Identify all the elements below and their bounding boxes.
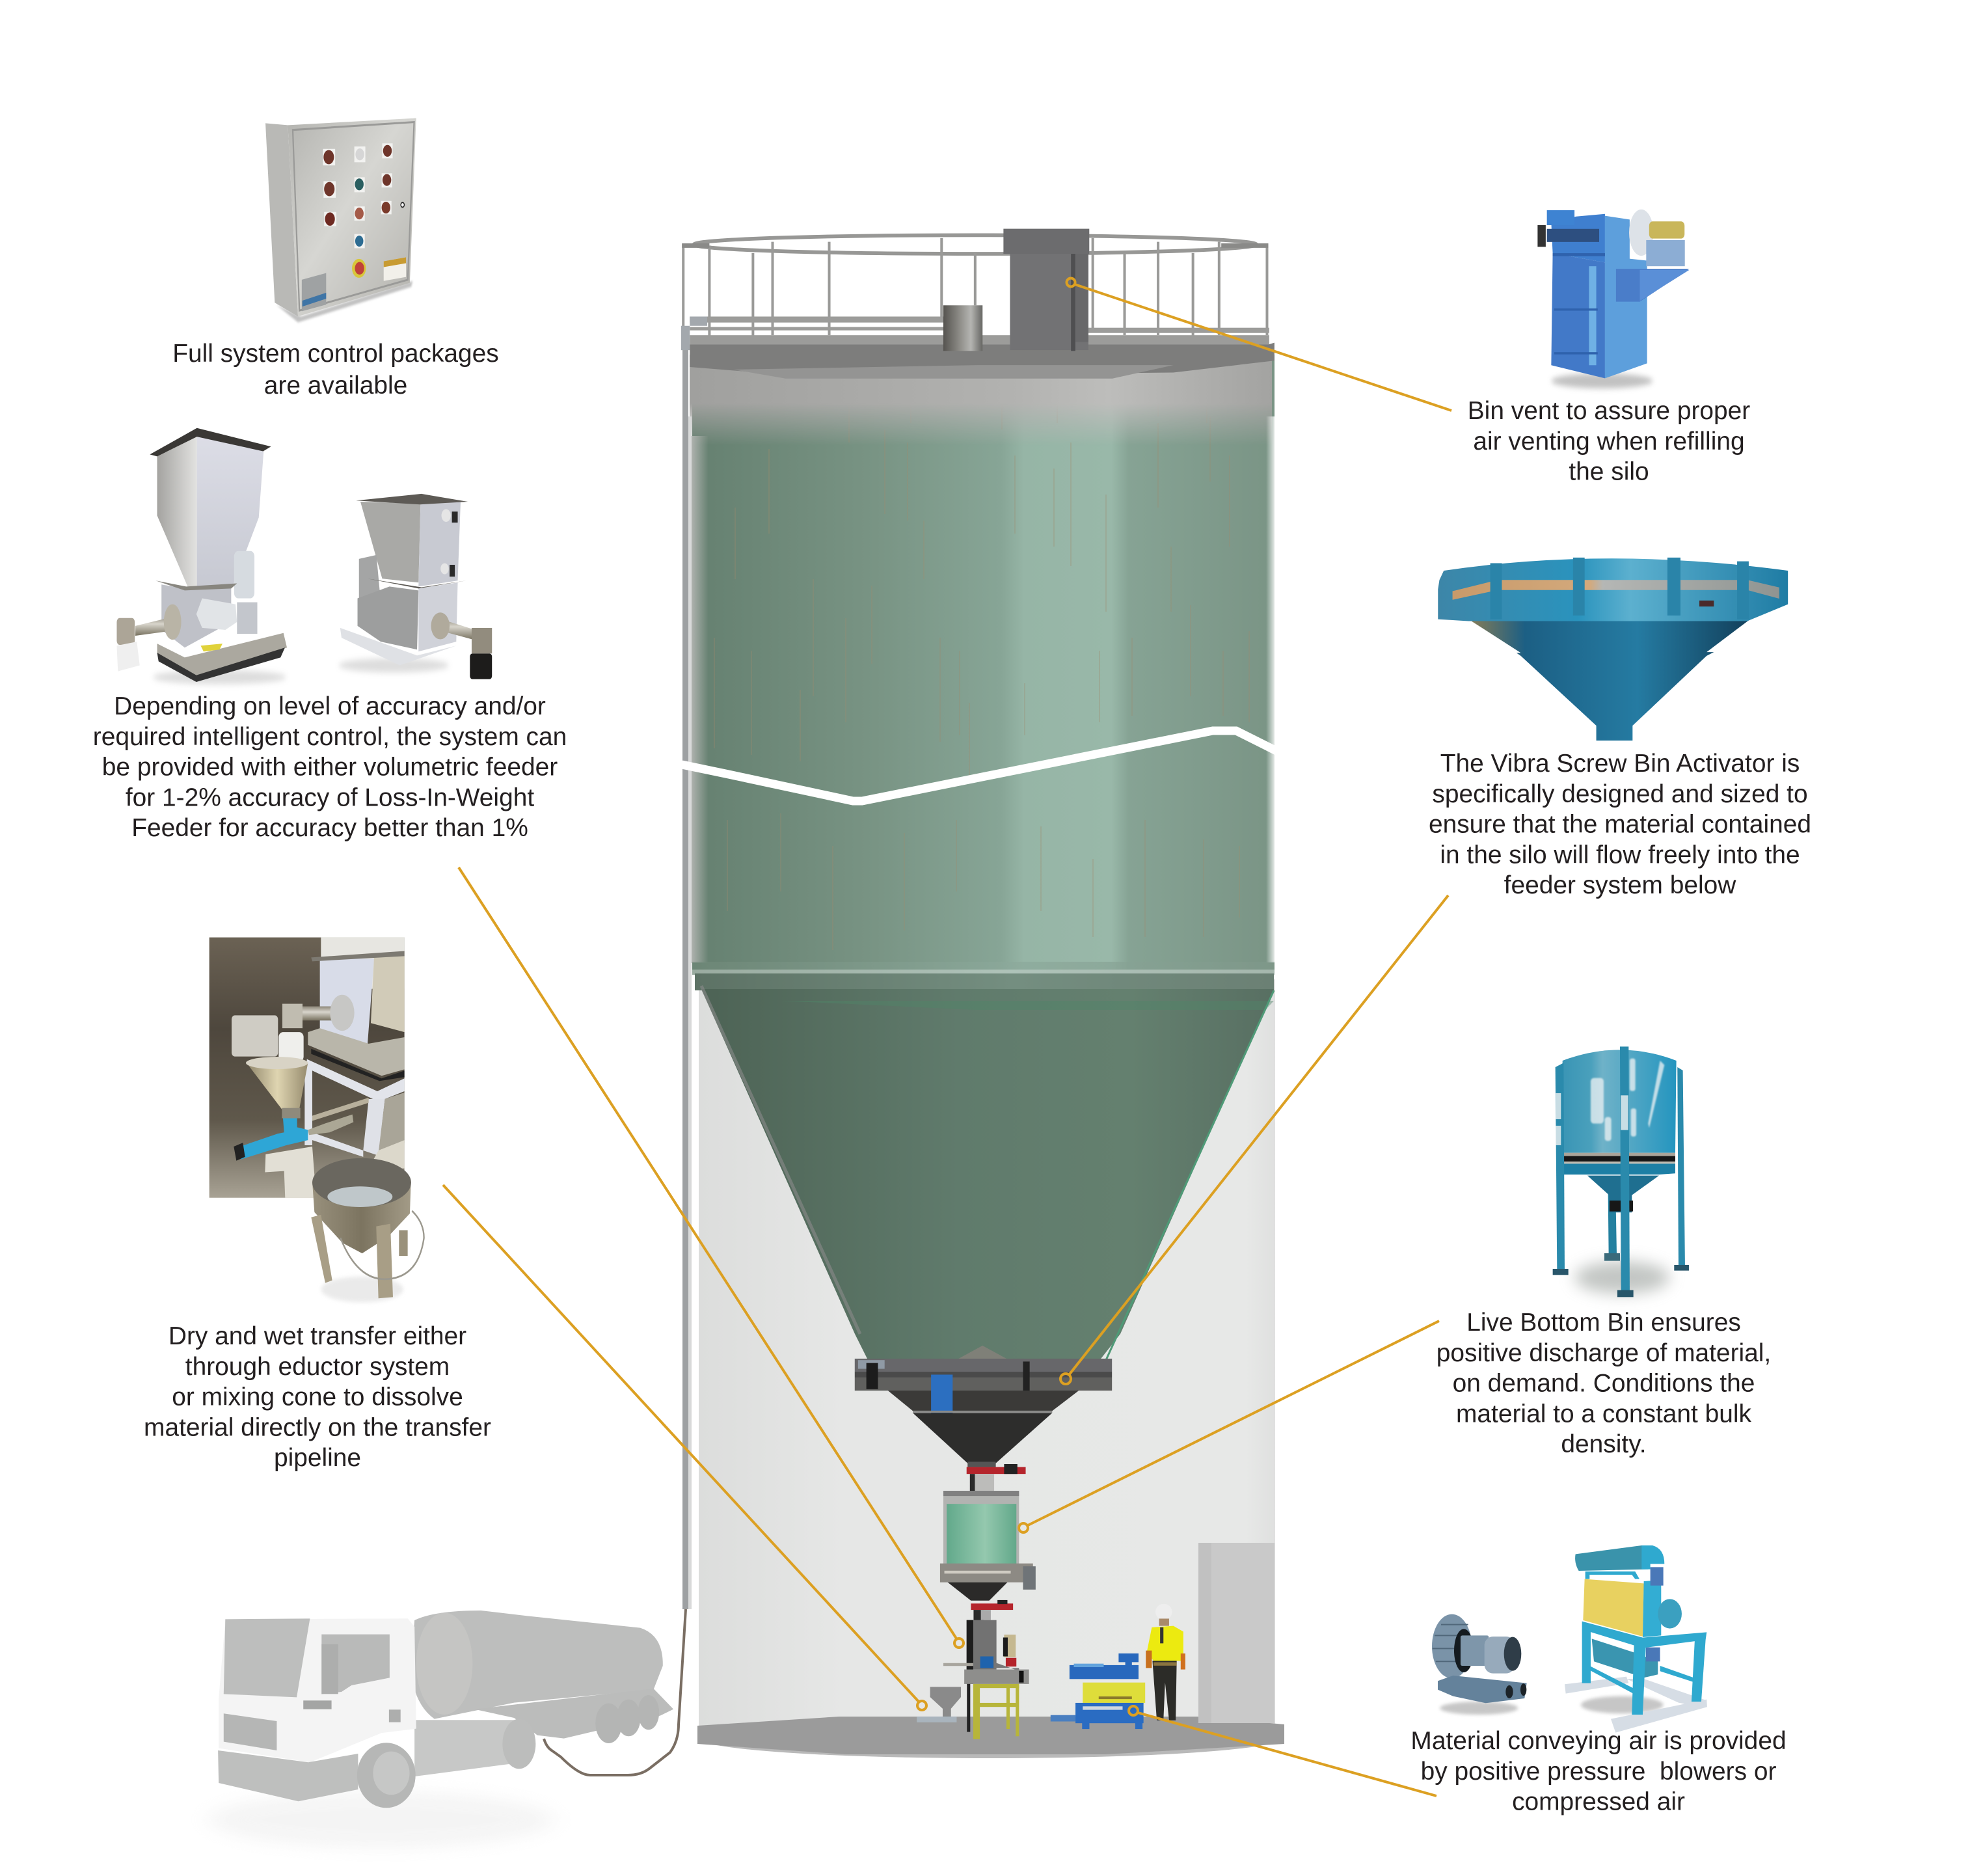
yellow panel: [1583, 1579, 1644, 1637]
text: bin vent: Bin vent to assure proper: [1468, 397, 1750, 425]
lower silencer: [1592, 1638, 1660, 1678]
bin shadow: [1574, 1261, 1670, 1294]
starter box: [1646, 240, 1685, 266]
flexible sock: [278, 1032, 304, 1062]
small cylinder: [943, 305, 982, 351]
bin vent leader: [1067, 279, 1451, 411]
step panel: [389, 1709, 401, 1722]
left pipe bend: [681, 316, 707, 350]
text: feeder options: Depending on level of accuracy and/or: [114, 692, 546, 720]
grille: [224, 1713, 277, 1750]
panel side: [265, 123, 298, 316]
body left face: [1551, 253, 1605, 378]
feeder in photo: [304, 951, 405, 1169]
transfer hose: [544, 1609, 686, 1775]
leg highlights: [1556, 1093, 1628, 1145]
button caps: [323, 145, 392, 247]
grey top fade: [690, 355, 1272, 446]
upper valve: [967, 1461, 1026, 1474]
bin cone: [1587, 1176, 1659, 1212]
text: bin activator: specifically designed and sized to: [1432, 780, 1808, 808]
activator gap: [1453, 580, 1779, 600]
text: bin vent: the silo: [1569, 458, 1649, 486]
silo illustration: [681, 229, 1284, 1758]
volumetric feeder images: [116, 428, 492, 685]
text: bin vent: air venting when refilling: [1473, 428, 1745, 455]
pulse valves: [1537, 210, 1599, 247]
loss-in-weight feeder: [116, 428, 287, 682]
control panel image: [265, 118, 416, 322]
walkway rails: [690, 316, 1269, 345]
blower leader: [1129, 1706, 1437, 1796]
text: live bottom bin: positive discharge of material,: [1437, 1339, 1771, 1367]
worker: [1146, 1604, 1185, 1720]
railing: [682, 235, 1268, 343]
feeder leader: [459, 867, 964, 1648]
blower package: [1051, 1653, 1145, 1729]
text: live bottom bin: density.: [1561, 1430, 1647, 1458]
eductor bracket: [265, 1147, 316, 1198]
activator rim: [1438, 558, 1788, 621]
blower head: [1658, 1599, 1682, 1629]
text: bin activator: in the silo will flow freely into the: [1440, 841, 1800, 869]
tanker truck: [209, 1611, 673, 1848]
silo cylinder material: [692, 355, 1275, 970]
bin drum: [1563, 1050, 1677, 1153]
motor: [1649, 221, 1684, 239]
text: live bottom bin: on demand. Conditions the: [1453, 1370, 1755, 1398]
bin vent image: [1537, 210, 1689, 388]
text: feeder options: Feeder for accuracy better than 1%: [131, 814, 528, 842]
leader lines: [443, 279, 1451, 1796]
text: dry and wet transfer: material directly on the transfer: [144, 1413, 491, 1441]
rear wheel: [502, 1719, 535, 1769]
kettle shadow: [321, 1277, 403, 1302]
upper housing: [1551, 214, 1605, 262]
bumper: [218, 1750, 358, 1801]
mixing cone: [246, 1057, 308, 1119]
cone material: [701, 989, 1274, 1361]
left edge fade: [692, 436, 708, 963]
feet: [1553, 1265, 1689, 1297]
lower valve: [971, 1600, 1013, 1610]
text: live bottom bin: Live Bottom Bin ensures: [1466, 1309, 1741, 1337]
vent shadow: [1551, 374, 1653, 388]
legs: [1556, 1046, 1685, 1292]
kettle: [311, 1158, 424, 1298]
nameplate: [302, 273, 326, 311]
eductor leader: [443, 1185, 926, 1710]
text: control packages: are available: [264, 372, 407, 400]
bin activator leader: [1060, 895, 1448, 1384]
live bottom bin: [943, 1491, 1019, 1567]
live bottom leader: [1019, 1321, 1439, 1532]
text: dry and wet transfer: or mixing cone to dissolve: [172, 1383, 463, 1411]
mixing hopper: [917, 1687, 961, 1722]
text: conveying air: by positive pressure blowers or: [1421, 1758, 1776, 1786]
text: bin activator: The Vibra Screw Bin Activator is: [1440, 750, 1800, 778]
cab: [219, 1618, 416, 1762]
break wave: [682, 731, 1280, 801]
warning label: [384, 257, 406, 281]
regenerative blower: [1432, 1614, 1527, 1703]
windshield: [224, 1618, 310, 1697]
package frame: [1582, 1622, 1706, 1715]
cone glaze strip: [781, 1001, 1274, 1010]
back leg: [1604, 1193, 1620, 1261]
activator tag: [1699, 601, 1714, 606]
eductor photo and mixing cone: [209, 938, 424, 1302]
text: feeder options: be provided with either volumetric feeder: [102, 754, 558, 782]
bin activator image: [1438, 558, 1788, 741]
roof disc underside: [733, 365, 1174, 379]
cylinder to cone band: [692, 962, 1275, 990]
chassis: [474, 1689, 673, 1739]
trailer wheels: [595, 1695, 659, 1743]
text: conveying air: Material conveying air is provided: [1410, 1727, 1787, 1755]
front wheel: [357, 1743, 416, 1808]
panel front: [288, 118, 416, 316]
feeder: [943, 1610, 1029, 1684]
text: dry and wet transfer: pipeline: [274, 1444, 361, 1472]
text: conveying air: compressed air: [1512, 1788, 1685, 1816]
text: bin activator: feeder system below: [1504, 871, 1736, 899]
lower silo shell: [699, 979, 1275, 1728]
silo floor: [697, 1717, 1284, 1758]
door handle: [303, 1700, 332, 1709]
truck shadow: [209, 1791, 554, 1848]
blue eductor: [234, 1115, 353, 1161]
text: bin activator: ensure that the material contained: [1429, 811, 1811, 839]
text: feeder options: required intelligent control, the system can: [93, 723, 567, 751]
silo equipment: [855, 1346, 1185, 1739]
live bottom bin image: [1553, 1046, 1689, 1297]
base beams: [1565, 1677, 1707, 1733]
activator lower cone: [1468, 619, 1750, 741]
button bezels: [323, 143, 393, 248]
door mirror: [321, 1644, 338, 1694]
streaks in material: [714, 377, 1249, 950]
volumetric feeder: [340, 494, 492, 679]
text: dry and wet transfer: through eductor system: [185, 1353, 450, 1381]
upper right background: [321, 938, 405, 989]
background door: [1198, 1543, 1275, 1723]
highlights: [1591, 1059, 1664, 1141]
body right face: [1605, 216, 1647, 378]
top silencer: [1575, 1545, 1664, 1586]
side pipe: [682, 329, 692, 1609]
bin activator: [855, 1346, 1112, 1463]
cone right rim: [1106, 990, 1274, 1360]
panel shadow: [277, 281, 412, 322]
right edge fade: [1266, 416, 1275, 963]
panel frame: [293, 122, 414, 310]
text: control packages: Full system control packages: [172, 340, 499, 368]
tank end: [416, 1612, 472, 1715]
fuel tank: [414, 1720, 520, 1776]
activator brackets: [1491, 558, 1749, 619]
rubber seal ring: [1563, 1153, 1675, 1175]
blower shadows: [1440, 1696, 1664, 1715]
bin flange and cone: [940, 1564, 1036, 1601]
photo background: [209, 938, 405, 1198]
text: dry and wet transfer: Dry and wet transfer either: [169, 1322, 466, 1350]
blower images: [1432, 1545, 1707, 1733]
cyan block: [1643, 1580, 1661, 1637]
discharge tube: [282, 995, 355, 1031]
filter: [232, 1015, 278, 1057]
key: [401, 202, 404, 207]
feeder shadows: [153, 659, 449, 685]
tank: [411, 1611, 663, 1719]
text: feeder options: for 1-2% accuracy of Loss-In-Weight: [126, 783, 534, 811]
roof and railing: [681, 229, 1275, 379]
connecting pipe: [970, 1474, 994, 1491]
discharge chute: [1616, 269, 1689, 302]
bin vent unit: [1003, 229, 1089, 351]
panel buttons: [323, 143, 393, 248]
fan: [1629, 210, 1653, 256]
side window: [321, 1635, 390, 1694]
cone left rim: [701, 986, 860, 1334]
yellow stand: [967, 1684, 1019, 1739]
roof disc: [690, 343, 1275, 374]
door straps: [1553, 253, 1605, 365]
emergency stop: [352, 259, 366, 278]
text: live bottom bin: material to a constant bulk: [1456, 1400, 1752, 1428]
